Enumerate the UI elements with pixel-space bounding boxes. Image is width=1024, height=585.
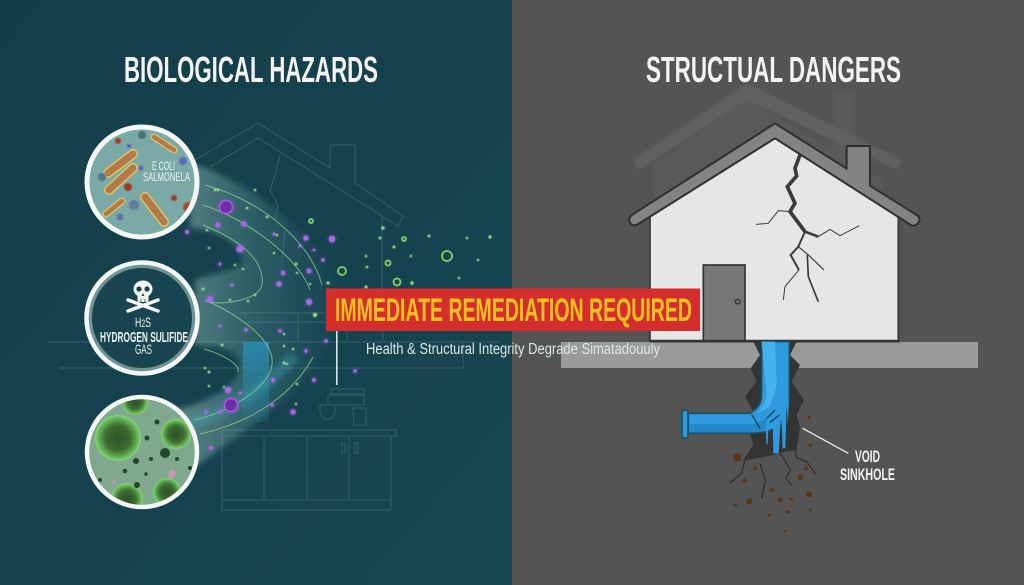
label: hydrogen sulifide: HYDROGEN SULIFIDE xyxy=(100,329,188,346)
callout line xyxy=(803,428,848,453)
banner: immediate remediation required: IMMEDIATE REMEDIATION REQUIRED xyxy=(335,292,692,328)
swirl of contamination xyxy=(175,163,340,470)
sinkhole void xyxy=(743,342,804,461)
structural house xyxy=(629,123,920,341)
circle: e coli and salmonella xyxy=(87,127,197,237)
icon: skull and crossbones xyxy=(128,280,158,311)
label: gas: GAS xyxy=(135,341,152,357)
foundation slab xyxy=(561,342,978,368)
wall crack xyxy=(756,155,859,302)
label: H2S: H2S xyxy=(135,314,151,330)
burst pipe and sinkhole xyxy=(682,342,848,533)
banner: immediate remediation required xyxy=(326,288,700,331)
green particles and spores xyxy=(202,189,492,405)
circle: green viruses xyxy=(87,389,197,515)
subtitle: Health & Structural Integrity Degrade Simatadouuly xyxy=(366,341,660,358)
ghost outline: house and kitchen xyxy=(47,123,500,510)
label: void sinkhole xyxy=(840,447,895,484)
water jets xyxy=(766,403,789,453)
label: void sinkhole: SINKHOLE xyxy=(840,465,895,484)
panel: structural dangers background xyxy=(512,0,1024,585)
door xyxy=(703,265,745,341)
ground cracks xyxy=(729,450,816,498)
heading: biological hazards: BIOLOGICAL HAZARDS xyxy=(124,49,378,90)
circle: hydrogen sulfide gas xyxy=(86,262,198,374)
blue pipe xyxy=(688,342,789,433)
panel: biological hazards background xyxy=(0,0,512,585)
connector line under banner xyxy=(336,331,338,385)
slab top edge xyxy=(650,340,900,342)
ghost house behind structural house xyxy=(633,83,902,300)
purple particles xyxy=(185,200,357,450)
label: e coli: E COLI xyxy=(152,159,175,173)
label: void sinkhole: VOID xyxy=(855,447,880,466)
soil particles xyxy=(733,416,812,533)
label: salmonela: SALMONELA xyxy=(143,170,190,184)
